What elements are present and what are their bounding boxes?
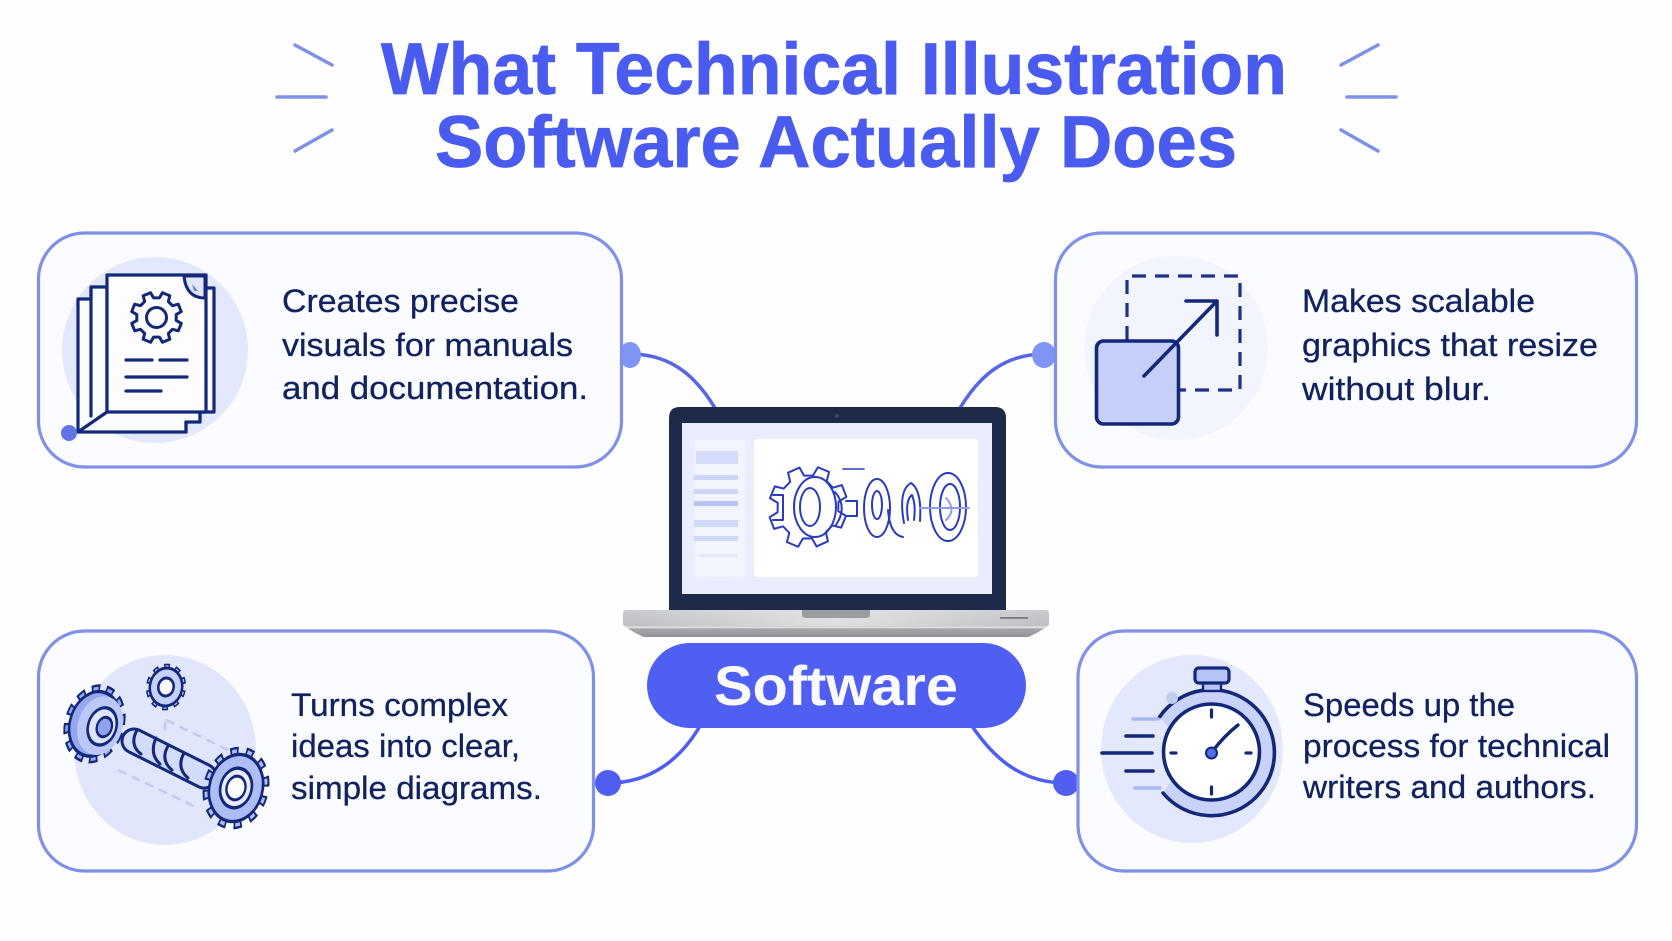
- connector: top right: [960, 354, 1045, 408]
- left title accent ticks: [277, 45, 332, 151]
- text: turns complex ideas: simple diagrams.: [291, 770, 542, 806]
- laptop base: [623, 610, 1049, 637]
- software pill: Software: [714, 654, 958, 717]
- panel: manuals and documentation: [38, 233, 622, 467]
- panel: complex ideas: [38, 631, 594, 871]
- panel: scalable graphics: [1056, 233, 1636, 467]
- right gear: [201, 747, 271, 829]
- text: creates precise visuals: [282, 283, 588, 406]
- webcam: [835, 414, 839, 418]
- exploded gear drawing: [757, 455, 969, 559]
- text: speeds up the process: process for technical: [1303, 728, 1610, 764]
- text: creates precise visuals: visuals for manuals: [282, 327, 573, 363]
- text: makes scalable graphics: without blur.: [1301, 371, 1491, 407]
- title: Software Actually Does: [435, 102, 1237, 183]
- small gear: [147, 665, 185, 709]
- text: makes scalable graphics: graphics that resize: [1302, 327, 1598, 363]
- software pill: [647, 643, 1026, 728]
- connector: bottom left: [608, 726, 700, 783]
- node: top left: [619, 342, 641, 368]
- text: creates precise visuals: Creates precise: [282, 283, 519, 319]
- text: turns complex ideas: Turns complex: [291, 687, 508, 723]
- text: turns complex ideas: ideas into clear,: [291, 728, 520, 764]
- text: makes scalable graphics: [1301, 283, 1598, 407]
- software sidebar: [694, 440, 745, 577]
- card background: [1056, 233, 1636, 467]
- connector: top left: [630, 354, 715, 408]
- speaker slot: [1000, 617, 1028, 619]
- shaft: [134, 730, 204, 778]
- text: turns complex ideas: [291, 687, 542, 806]
- icon: stopwatch: [1101, 655, 1283, 843]
- icon: exploded gear assembly: [61, 655, 271, 845]
- laptop illustration: [623, 407, 1049, 637]
- text: speeds up the process: Speeds up the: [1303, 687, 1515, 723]
- text: creates precise visuals: and documentation.: [282, 370, 588, 406]
- software canvas: [754, 439, 978, 577]
- trackpad notch: [802, 610, 870, 618]
- title: [381, 29, 1287, 183]
- node: bottom right: [1053, 770, 1079, 796]
- icon: resize square with arrow: [1084, 256, 1268, 440]
- icon: document stack with gear: [61, 257, 248, 443]
- card background: [38, 233, 622, 467]
- text: speeds up the process: writers and authors.: [1302, 769, 1596, 805]
- right title accent ticks: [1341, 45, 1396, 151]
- card background: [1078, 631, 1636, 871]
- node: bottom left: [595, 770, 621, 796]
- laptop lid: [669, 407, 1006, 610]
- node: top right: [1032, 342, 1056, 368]
- card background: [38, 631, 594, 871]
- base highlight: [623, 610, 1049, 626]
- laptop screen: [682, 423, 992, 594]
- connector: bottom right: [972, 726, 1066, 783]
- text: makes scalable graphics: Makes scalable: [1302, 283, 1535, 319]
- panel: speeds up process: [1078, 631, 1636, 871]
- text: speeds up the process: [1302, 687, 1610, 805]
- title: What Technical Illustration: [381, 29, 1287, 110]
- left gear: [61, 685, 131, 764]
